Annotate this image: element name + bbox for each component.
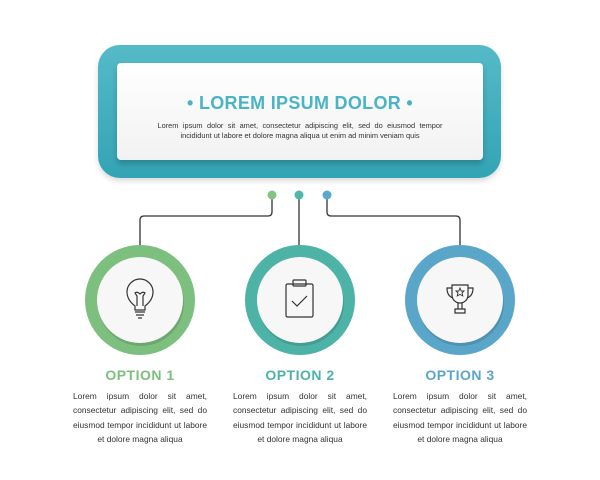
- option 2 circle: [245, 245, 355, 355]
- option 2 text: [233, 367, 367, 444]
- option 1 text: Lorem ipsum dolor sit amet, consectetur adipiscing elit, sed do eiusmod tempor incididunt ut labore et dolore magna aliqua: [73, 391, 207, 444]
- header box: [98, 45, 501, 178]
- option 2 text: Lorem ipsum dolor sit amet, consectetur adipiscing elit, sed do eiusmod tempor incididunt ut labore et dolore magna aliqua: [233, 391, 367, 444]
- header text: Lorem ipsum dolor sit amet, consectetur adipiscing elit, sed do eiusmod tempor incididunt ut labore et dolore magna aliqua ut enim ad minim veniam quis: [158, 121, 442, 140]
- option 1 text: [73, 367, 207, 444]
- option 2 text: OPTION 2: [265, 367, 335, 383]
- icon: lightbulb: [127, 279, 153, 318]
- icon: trophy: [447, 285, 473, 313]
- option 3 text: OPTION 3: [425, 367, 495, 383]
- option 1 text: OPTION 1: [105, 367, 175, 383]
- option 3 text: [393, 367, 527, 444]
- option 1 circle: [85, 245, 195, 355]
- header inner panel: [117, 63, 483, 160]
- title: • LOREM IPSUM DOLOR •: [187, 93, 413, 113]
- option 3 circle: [405, 245, 515, 355]
- icon: clipboard: [286, 280, 313, 317]
- option 3 text: Lorem ipsum dolor sit amet, consectetur adipiscing elit, sed do eiusmod tempor incididunt ut labore et dolore magna aliqua: [393, 391, 527, 444]
